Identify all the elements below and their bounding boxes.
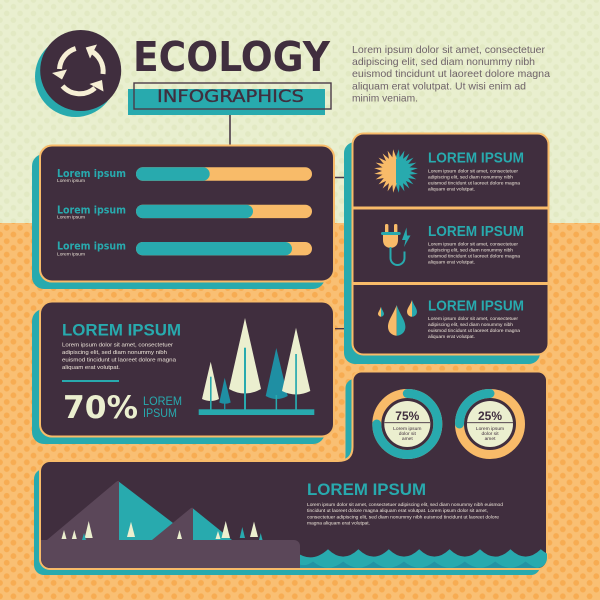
icon: sun (374, 149, 418, 193)
connector: title to bars panel (229, 109, 231, 146)
background: pale green upper half (0, 0, 600, 223)
text: sun item: Lorem ipsum dolor sit amet, consectetuer (428, 168, 518, 174)
donut chart: 75 percent (377, 394, 438, 454)
text: plug item: aliquam erat volutpat. (428, 260, 475, 266)
donut chart: 25 percent: 25% (478, 409, 502, 423)
text: landscape heading and body: tincidunt ut laoreet dolore magna aliquam erat volutpat. Lorem ipsum dolor sit amet, (307, 508, 488, 514)
panel: forest and 70 percent (32, 302, 334, 444)
text: plug item (428, 224, 524, 266)
text: water item: adipiscing elit, sed diam nonummy nibh (428, 322, 513, 328)
bar row 3: Lorem ipsum (57, 251, 85, 256)
panel: right column with three items (344, 134, 548, 364)
icon: plug with bolt (381, 224, 410, 265)
bar row 2: Lorem ipsum (57, 204, 126, 216)
text: landscape heading and body: LOREM IPSUM (307, 481, 426, 499)
text: forest heading and body: aliquam erat volutpat. (62, 365, 121, 371)
donut chart: 25 percent: Lorem ipsum (476, 426, 504, 432)
icon: recycle logo (35, 30, 121, 117)
bar row 2: Lorem ipsum (57, 215, 85, 220)
stat: 70 percent: LOREM (143, 396, 182, 408)
donut chart: 75 percent: dolor sit (399, 431, 417, 437)
donut chart: 25 percent: dolor sit (481, 431, 499, 437)
text: water item (428, 298, 524, 340)
stat: 70 percent: IPSUM (143, 408, 177, 420)
text: landscape heading and body: magna aliquam erat volutpat. (307, 520, 370, 526)
title: ECOLOGY: ECOLOGY (133, 33, 331, 81)
text: forest heading and body: euismod tincidunt ut laoreet dolore magna (62, 358, 177, 364)
bar row 1: Lorem ipsum (57, 168, 126, 180)
donut chart: 75 percent: amet (402, 436, 413, 442)
text: plug item: euismod tincidunt ut laoreet dolore magna (428, 254, 520, 260)
text: landscape heading and body: Lorem ipsum dolor sit amet, consectetuer adipiscing elit, sed diam nonummy nibh euismod (307, 502, 503, 508)
illustration: trees (199, 318, 314, 415)
text: forest heading and body (62, 320, 181, 371)
bar row 1: Lorem ipsum (57, 178, 85, 183)
intro paragraph: minim veniam. (352, 94, 418, 104)
intro paragraph (352, 45, 550, 104)
intro paragraph: aliquam erat volutpat. Ut wisi enim ad (352, 82, 526, 92)
text: landscape heading and body (307, 481, 503, 526)
connector: forest panel to right panel (334, 328, 352, 330)
text: plug item: adipiscing elit, sed diam nonummy nibh (428, 248, 513, 254)
panel: progress bars (32, 146, 334, 289)
bar row 1 (57, 167, 312, 183)
text: plug item: Lorem ipsum dolor sit amet, consectetuer (428, 242, 518, 248)
connector: bars panel to right panel (334, 176, 352, 178)
text: water item: Lorem ipsum dolor sit amet, consectetuer (428, 316, 518, 322)
text: forest heading and body: Lorem ipsum dolor sit amet, consectetuer (62, 342, 173, 348)
icon: water drops (378, 300, 417, 336)
donut chart: 75 percent: 75% (395, 409, 420, 423)
donut chart: 25 percent (460, 394, 520, 454)
text: forest heading and body: LOREM IPSUM (62, 320, 181, 340)
text: water item: LOREM IPSUM (428, 298, 524, 314)
bar row 2 (57, 204, 312, 220)
text: sun item: euismod tincidunt ut laoreet dolore magna (428, 180, 520, 186)
bar row 3: Lorem ipsum (57, 240, 126, 252)
donut chart: 75 percent: Lorem ipsum (393, 426, 421, 432)
illustration: waves (296, 549, 550, 568)
text: sun item (428, 150, 524, 192)
text: forest heading and body: adipiscing elit, sed diam nonummy nibh (62, 350, 167, 356)
illustration: mountains and small trees (40, 481, 300, 570)
text: water item: euismod tincidunt ut laoreet dolore magna (428, 328, 520, 334)
intro paragraph: adipiscing elit, sed diam nonummy nibh (352, 57, 535, 68)
intro paragraph: euismod tincidunt ut laoreet dolore magna (352, 69, 550, 80)
stat: 70 percent (63, 390, 182, 426)
text: sun item: aliquam erat volutpat. (428, 186, 475, 192)
panel: donuts and landscape L-shape (34, 371, 550, 575)
background: orange lower half (0, 223, 600, 600)
bar row 3 (57, 240, 312, 256)
text: sun item: adipiscing elit, sed diam nonummy nibh (428, 174, 513, 180)
subtitle banner: INFOGRAPHICS (128, 83, 331, 115)
intro paragraph: Lorem ipsum dolor sit amet, consectetuer (352, 45, 546, 56)
text: plug item: LOREM IPSUM (428, 224, 524, 240)
text: sun item: LOREM IPSUM (428, 150, 524, 166)
stat: 70 percent: 70% (63, 390, 138, 426)
text: water item: aliquam erat volutpat. (428, 334, 475, 340)
donut chart: 25 percent: amet (485, 436, 496, 442)
text: landscape heading and body: consectetuer adipiscing elit, sed diam nonummy nibh euismod tincidunt ut laoreet dolore (307, 514, 499, 520)
subtitle banner: INFOGRAPHICS: INFOGRAPHICS (157, 87, 304, 107)
